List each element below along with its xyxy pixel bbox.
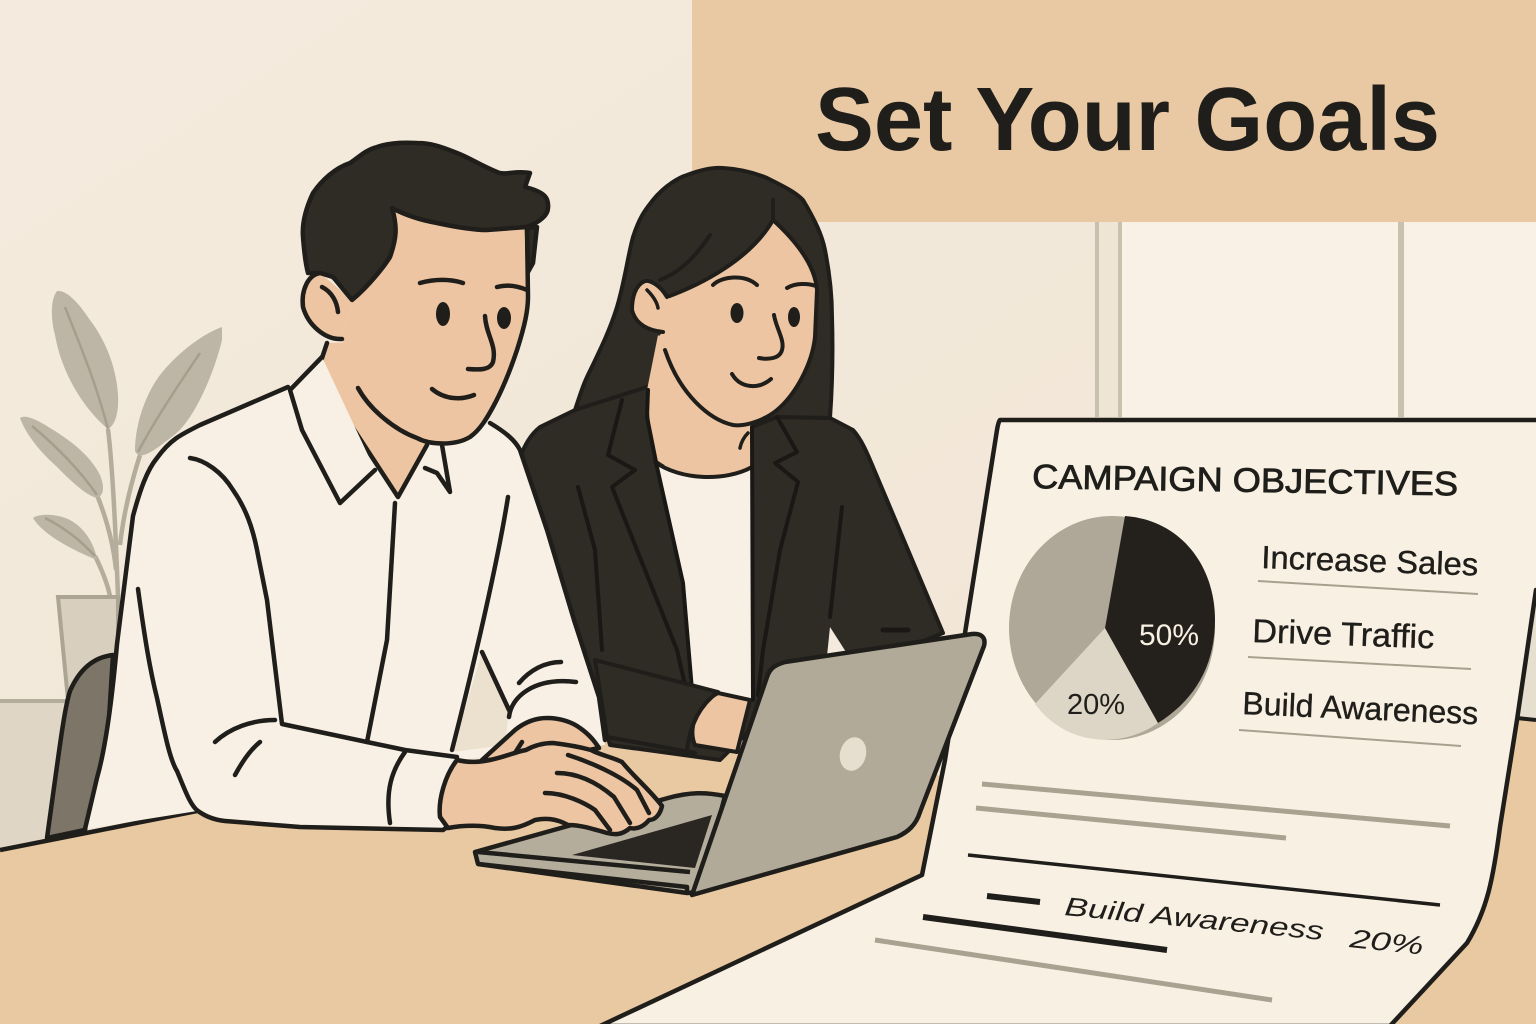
document heading: CAMPAIGN OBJECTIVES bbox=[1032, 458, 1458, 503]
desk edge at right bbox=[1517, 718, 1536, 720]
title: Set Your Goals bbox=[815, 70, 1440, 170]
woman face bbox=[665, 220, 817, 425]
man hair bbox=[303, 143, 548, 300]
front hand bbox=[440, 743, 662, 834]
man hands bbox=[440, 718, 662, 834]
woman facial features bbox=[730, 303, 744, 323]
icon: potted plant bbox=[20, 291, 222, 700]
woman hair bbox=[575, 168, 832, 440]
title banner bbox=[692, 0, 1536, 222]
window panels bbox=[1095, 222, 1536, 422]
wall gap under arm bbox=[827, 627, 846, 656]
woman ear bbox=[632, 281, 672, 345]
chair bbox=[47, 655, 113, 838]
laptop keyboard bbox=[572, 815, 712, 868]
woman neck bbox=[647, 335, 752, 477]
man bbox=[85, 143, 605, 830]
man shirt bbox=[85, 357, 605, 830]
paper sheet bbox=[600, 420, 1536, 1024]
woman hand bbox=[692, 693, 750, 752]
legend: Build Awareness bbox=[1242, 685, 1479, 731]
laptop base bbox=[475, 793, 725, 895]
man ear bbox=[303, 273, 352, 339]
document footer label: Build Awareness bbox=[1063, 891, 1325, 946]
pie chart: 50% bbox=[1139, 619, 1199, 652]
icon: laptop logo bbox=[836, 734, 870, 774]
pie chart bbox=[1009, 516, 1215, 740]
woman blazer bbox=[520, 387, 943, 760]
back hand bbox=[482, 718, 599, 760]
desk bbox=[0, 718, 1536, 1024]
man collar bbox=[290, 357, 375, 503]
man shirt lines bbox=[85, 387, 605, 830]
document text lines bbox=[875, 784, 1450, 1000]
legend: Increase Sales bbox=[1261, 539, 1479, 583]
legend bbox=[1239, 539, 1479, 746]
woman white top bbox=[657, 465, 752, 700]
document bbox=[600, 420, 1536, 1024]
document footer value: 20% bbox=[1347, 923, 1425, 961]
side table bbox=[0, 699, 70, 851]
man neck bbox=[317, 340, 427, 497]
woman bbox=[520, 168, 943, 760]
legend: Drive Traffic bbox=[1252, 612, 1435, 655]
man facial features bbox=[436, 302, 450, 326]
man shirt shaded gap bbox=[452, 652, 509, 752]
woman lapels bbox=[578, 390, 908, 700]
man face bbox=[342, 208, 528, 445]
woman sleeve cuff bbox=[595, 660, 718, 753]
man sideburn bbox=[527, 227, 537, 272]
pie chart: 20% bbox=[1067, 689, 1125, 721]
laptop lid bbox=[692, 634, 984, 895]
